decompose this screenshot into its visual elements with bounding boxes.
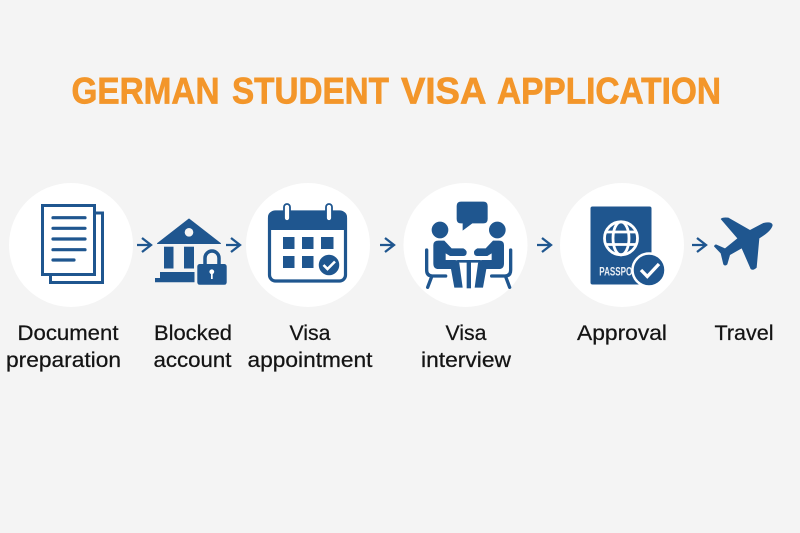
arrow 3 — [380, 238, 394, 252]
step: travel — [714, 217, 774, 345]
title: STUDENT — [232, 70, 389, 112]
white circle: document — [9, 183, 133, 307]
icon: airplane — [714, 217, 773, 270]
arrow 1 — [137, 238, 151, 252]
step: approval — [560, 183, 684, 345]
white circle: passport — [560, 183, 684, 307]
icon: calendar — [268, 204, 347, 281]
label: visa interview: Visa — [446, 322, 487, 345]
icon: passport with check — [590, 206, 666, 286]
title: VISA — [401, 70, 486, 112]
label: document preparation: Document — [18, 322, 119, 345]
label: blocked account: account — [154, 349, 232, 372]
step: blocked account — [154, 219, 232, 372]
white circle: calendar — [246, 183, 370, 307]
label: travel: Travel — [714, 322, 774, 345]
icon: passport with check: PASSPO — [599, 266, 632, 278]
step: visa appointment — [246, 183, 373, 372]
title: GERMAN — [72, 70, 220, 112]
label: visa interview: interview — [421, 349, 512, 372]
step: document preparation — [6, 183, 133, 372]
step: visa interview — [404, 183, 528, 372]
label: visa appointment: Visa — [290, 322, 331, 345]
label: document preparation: preparation — [6, 349, 121, 372]
label: approval: Approval — [577, 322, 667, 345]
title: APPLICATION — [497, 70, 721, 112]
arrow 4 — [537, 238, 551, 252]
label: blocked account: Blocked — [154, 322, 232, 345]
icon: two people at a table — [427, 202, 511, 288]
arrow 5 — [692, 238, 706, 252]
icon: bank with padlock — [155, 219, 227, 285]
icon: documents — [42, 206, 102, 282]
arrow 2 — [226, 238, 240, 252]
label: visa appointment: appointment — [248, 349, 373, 372]
white circle: interview — [404, 183, 528, 307]
